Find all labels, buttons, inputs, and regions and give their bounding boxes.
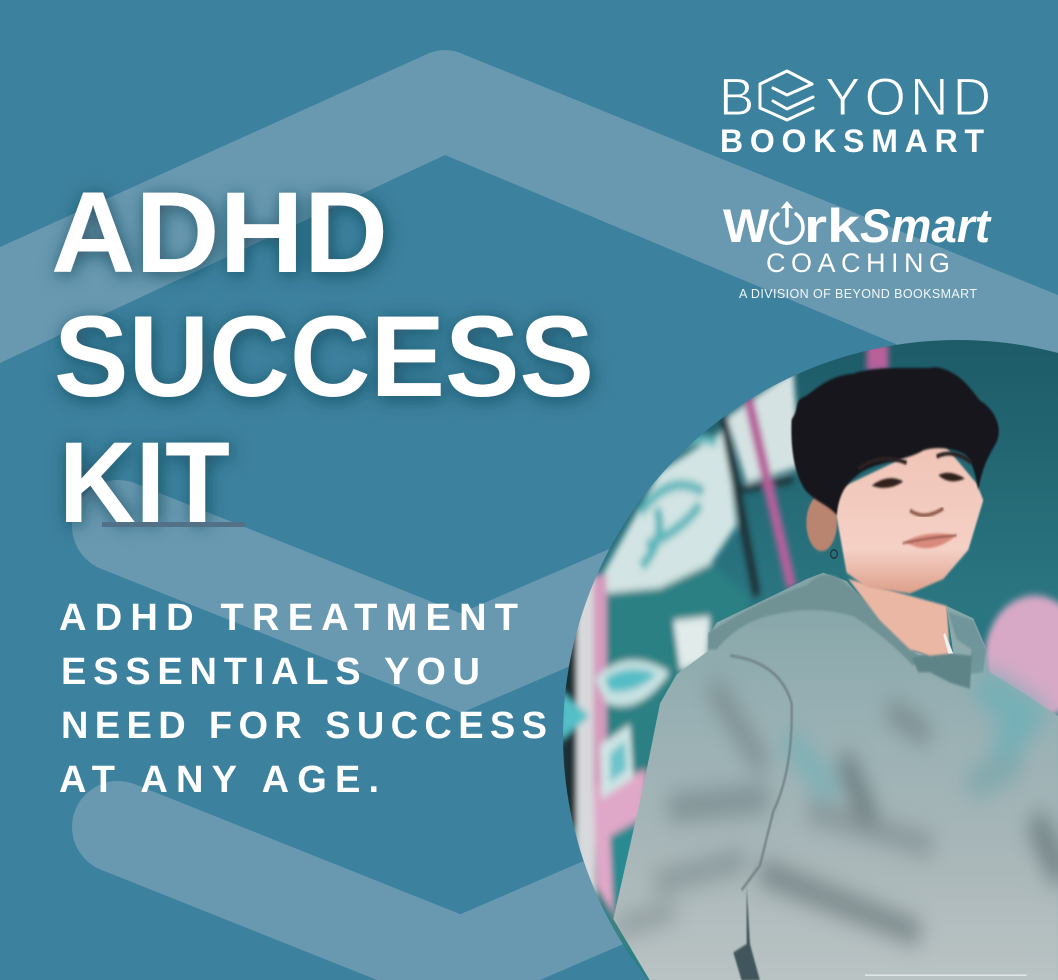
sleeve seam — [730, 656, 792, 890]
hoodie — [613, 573, 1058, 980]
subtitle — [59, 597, 547, 801]
logo wordmark: Beyond — [719, 68, 991, 127]
logo: WorkSmart Coaching — [723, 199, 992, 301]
eyes and brows — [858, 454, 972, 488]
circular photo — [550, 330, 1058, 980]
logo wordmark: WorkSmart — [723, 199, 992, 252]
subtitle: AT ANY AGE. — [59, 759, 379, 801]
ear and earring — [806, 495, 837, 551]
mouth — [903, 533, 957, 548]
hair — [791, 367, 999, 515]
nose shadow — [910, 508, 943, 515]
logo wordmark: Booksmart: BOOKSMART — [720, 123, 984, 159]
balloon — [985, 596, 1058, 720]
subtitle: ESSENTIALS YOU — [61, 651, 480, 693]
title — [51, 169, 594, 547]
neck — [848, 579, 950, 656]
face — [837, 436, 983, 593]
mural background — [560, 342, 888, 980]
hood rim — [708, 575, 918, 666]
logo tagline: A DIVISION OF BEYOND BOOKSMART — [739, 287, 977, 301]
fold shading — [620, 691, 1058, 932]
title: ADHD — [51, 169, 388, 297]
logo wordmark: WorkSmart: rk — [804, 199, 861, 252]
drawstring knot — [912, 652, 972, 689]
subtitle: ADHD TREATMENT — [59, 597, 518, 639]
logo: Beyond Booksmart — [719, 68, 991, 159]
subtitle: NEED FOR SUCCESS — [61, 705, 547, 747]
logo wordmark: WorkSmart: W — [723, 199, 770, 252]
icon: power arrow — [771, 202, 803, 243]
title: SUCCESS — [54, 293, 594, 421]
logo wordmark: WorkSmart: Smart — [860, 199, 992, 252]
logo wordmark: Beyond: YOND — [825, 68, 991, 127]
title: KIT — [59, 419, 230, 547]
title underline — [102, 522, 245, 527]
icon: hexagon book — [760, 71, 813, 120]
logo text: Coaching: COACHING — [766, 248, 950, 278]
logo wordmark: Beyond: B — [719, 68, 754, 127]
